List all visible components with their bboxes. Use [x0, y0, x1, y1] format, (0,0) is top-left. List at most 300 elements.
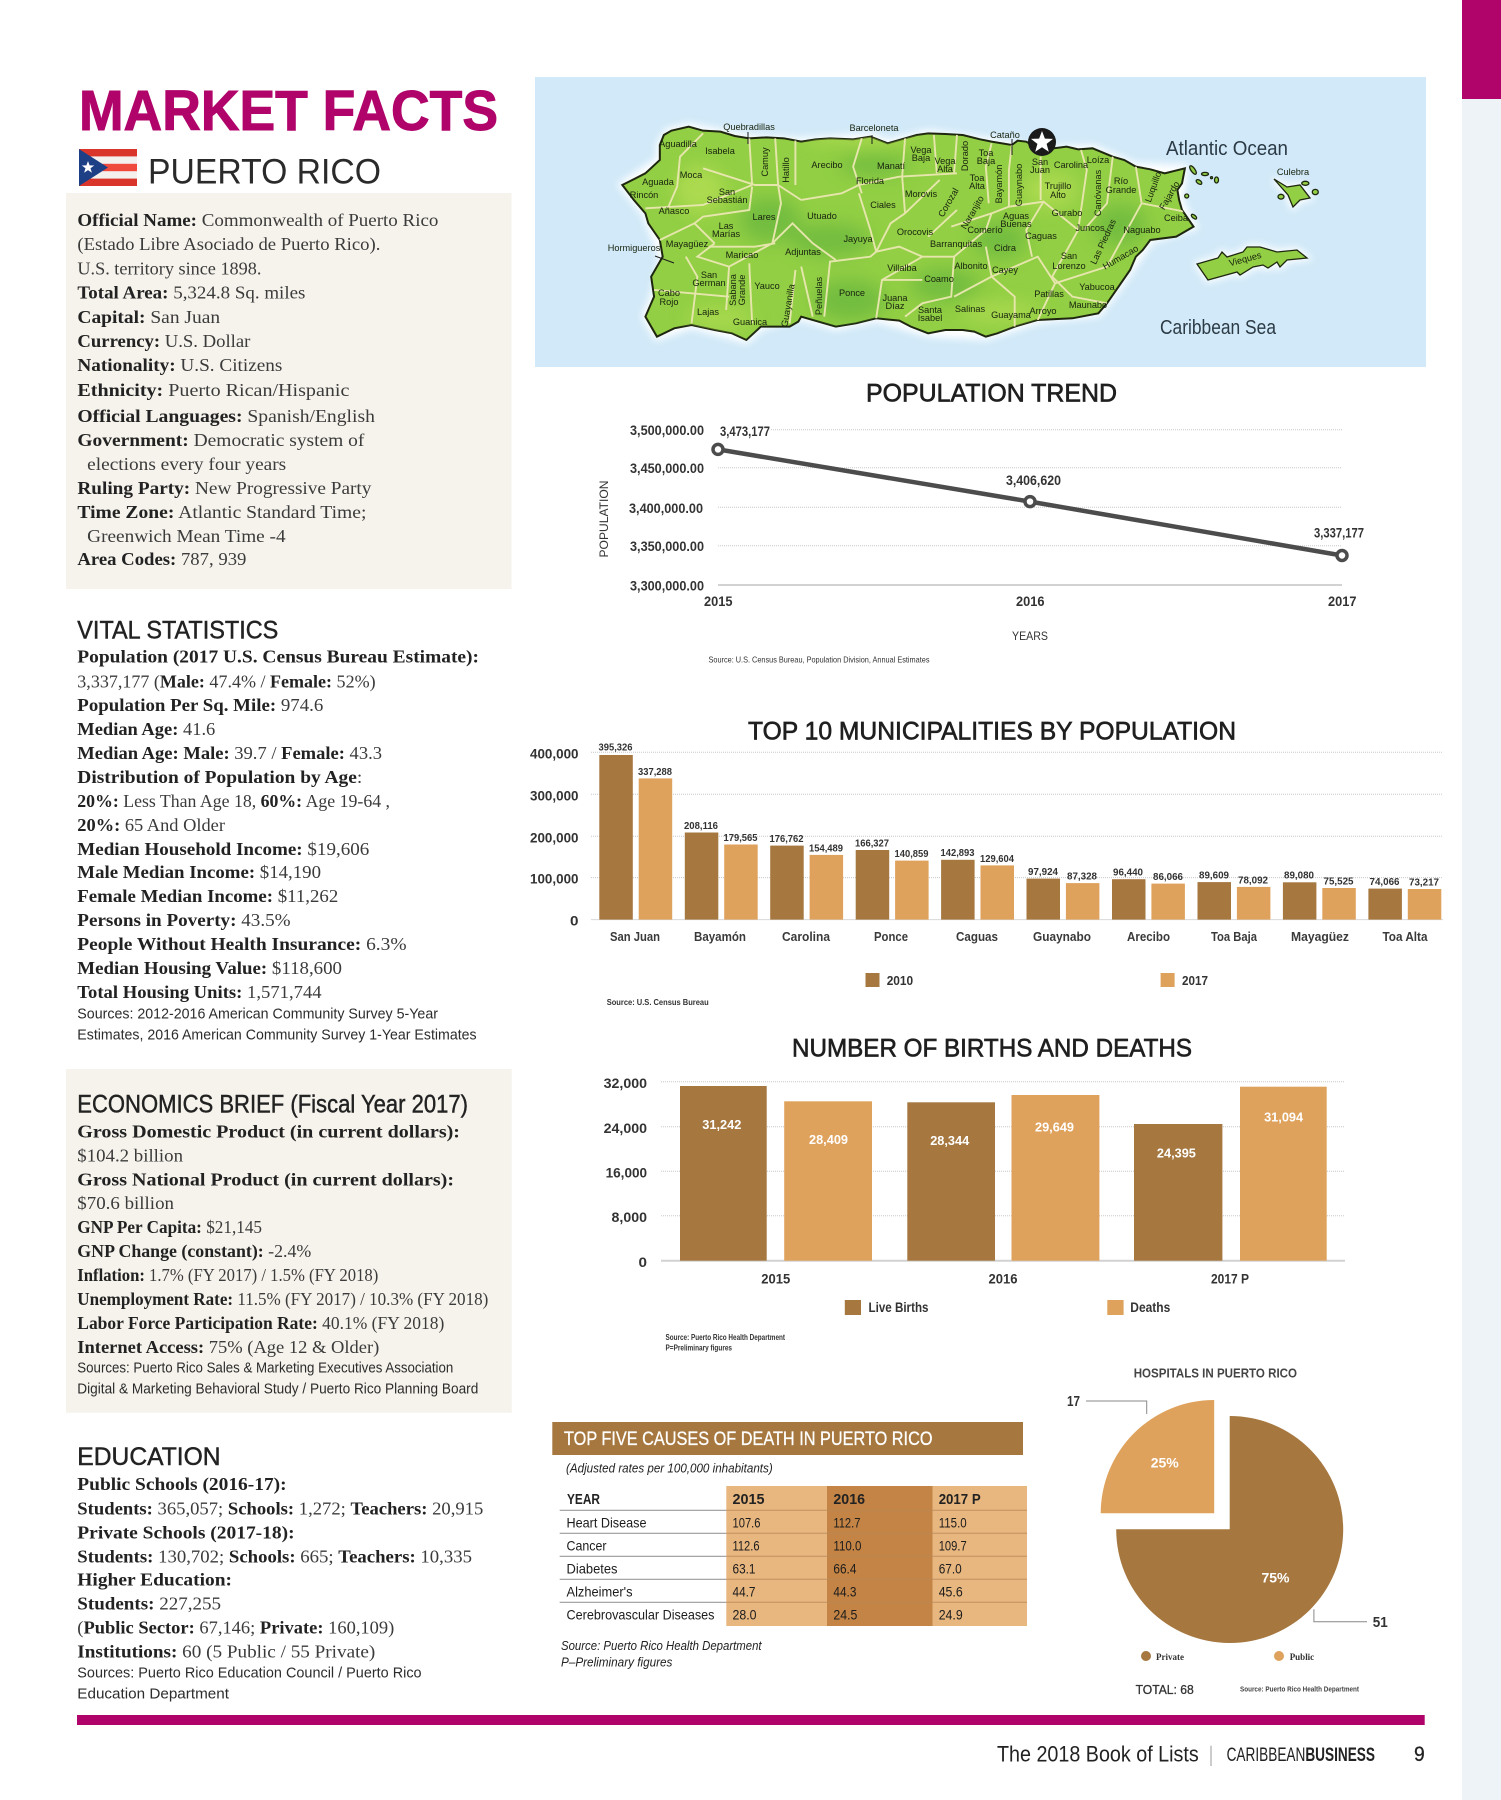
coloured columns [726, 1486, 1027, 1626]
municipality labels: Guanica [733, 317, 768, 327]
row: heart disease: 107.6 [732, 1514, 761, 1530]
row: cancer [566, 1537, 967, 1553]
x axis labels: 2016 [988, 1272, 1018, 1286]
category labels: Mayagüez [1291, 929, 1349, 944]
municipality labels [608, 122, 1310, 328]
municipality labels: Río [1114, 176, 1128, 186]
panel: education: Sources: Puerto Rico Education Council / Puerto Rico [77, 1664, 422, 1682]
value labels: 74,066 [1370, 876, 1400, 888]
category labels: Guaynabo [1033, 929, 1091, 944]
municipality labels: Lorenzo [1052, 261, 1086, 271]
pie chart: hospitals [1067, 1367, 1388, 1697]
panel: vital statistics: Persons in Poverty: 43.5% [77, 910, 291, 930]
x axis title: YEARS [1012, 631, 1048, 643]
magazine name: CARIBBEANBUSINESS [1227, 1745, 1375, 1766]
panel: economics brief: Sources: Puerto Rico Sales & Marketing Executives Association [77, 1360, 453, 1376]
row: alzheimer's: 44.7 [732, 1583, 756, 1599]
title: MARKET FACTS [79, 79, 498, 143]
municipality labels: Hormigueros [608, 243, 661, 253]
municipality labels: Humacao [1101, 243, 1140, 272]
y axis labels: 100,000 [530, 872, 578, 887]
value labels: 208,116 [684, 820, 718, 832]
label: Caribbean Sea: Caribbean Sea [1160, 317, 1277, 339]
municipality labels: Cidra [994, 243, 1017, 253]
municipality labels: Rojo [660, 297, 678, 307]
y axis labels: 300,000 [530, 788, 578, 803]
panel: official facts [66, 193, 512, 589]
panel: economics brief: GNP Change (constant): -2.4% [77, 1241, 311, 1262]
panel: official facts: Capital: San Juan [77, 307, 220, 327]
trend line [718, 449, 1342, 556]
panel: education: (Public Sector: 67,146; Private: 160,109) [77, 1618, 394, 1639]
table: top five causes of death [552, 1422, 1027, 1670]
value labels: 28,344 [930, 1133, 970, 1148]
panel: vital statistics: Population (2017 U.S. Census Bureau Estimate): [77, 647, 479, 668]
panel: education [77, 1443, 483, 1702]
value labels: 140,859 [894, 848, 929, 860]
municipality labels: Comerío [967, 225, 1003, 235]
value labels: 395,326 [598, 742, 633, 754]
slice labels: 25% [1151, 1455, 1179, 1471]
municipality labels: Sebastián [707, 195, 747, 205]
row: diabetes: Diabetes [566, 1560, 618, 1576]
municipality labels: Arecibo [811, 160, 843, 170]
municipality labels: Lares [753, 212, 776, 222]
category labels: Arecibo [1127, 929, 1170, 944]
value labels: 97,924 [1028, 866, 1058, 878]
table subtitle: (Adjusted rates per 100,000 inhabitants) [566, 1461, 773, 1476]
value labels: 176,762 [770, 833, 804, 845]
total: TOTAL: 68 [1136, 1682, 1194, 1697]
bars: live births [680, 1086, 1222, 1261]
panel: vital statistics: Sources: 2012-2016 American Community Survey 5-Year [77, 1006, 438, 1022]
panel: official facts: Time Zone: Atlantic Standard Time; [77, 502, 366, 522]
municipality labels: Ceiba [1164, 213, 1189, 223]
municipality labels: Vega [935, 156, 956, 166]
y axis labels: 3,400,000.00 [629, 501, 703, 516]
header row: 2017 P [939, 1491, 981, 1508]
municipality labels: Gurabo [1052, 208, 1082, 218]
municipality labels: Isabel [918, 313, 942, 323]
panel: education: Institutions: 60 (5 Public / 55 Private) [77, 1642, 375, 1663]
legend: Deaths [1130, 1300, 1170, 1315]
table source: Source: Puerto Rico Health Department [561, 1638, 763, 1653]
panel: vital statistics: 3,337,177 (Male: 47.4% / Female: 52%) [77, 671, 376, 692]
value labels: 129,604 [980, 853, 1014, 865]
municipality labels: Las Piedras [1088, 217, 1118, 266]
panel: vital statistics: Estimates, 2016 American Community Survey 1-Year Estimates [77, 1026, 477, 1044]
municipality labels: Aguada [642, 177, 675, 187]
category labels: Ponce [874, 929, 908, 944]
municipality labels: Naranjito [959, 194, 986, 231]
footer [997, 1742, 1425, 1767]
pie legend [1141, 1651, 1314, 1663]
value labels: 96,440 [1113, 866, 1143, 878]
panel: vital statistics: Median Housing Value: $118,600 [77, 958, 342, 978]
municipality labels: Marías [712, 229, 740, 239]
data points [713, 444, 1347, 560]
panel: education: Higher Education: [77, 1570, 232, 1590]
panel: vital statistics: People Without Health Insurance: 6.3% [77, 934, 407, 954]
municipality labels: Salinas [955, 304, 985, 314]
y axis labels: 32,000 [604, 1076, 647, 1091]
table heading band: TOP FIVE CAUSES OF DEATH IN PUERTO RICO [564, 1429, 932, 1450]
y axis labels: 200,000 [530, 830, 578, 845]
data labels: 3,473,177 [720, 424, 770, 439]
category labels: Toa Baja [1211, 929, 1258, 944]
municipality labels: Juncos [1075, 223, 1105, 233]
row: diabetes: 66.4 [833, 1560, 857, 1576]
municipality labels: Vieques [1228, 250, 1263, 268]
row: alzheimer's: 45.6 [939, 1583, 963, 1599]
source: P=Preliminary figures [666, 1344, 732, 1353]
x axis labels: 2016 [1016, 594, 1045, 609]
municipality labels: Guaynabo [1014, 164, 1024, 206]
municipality labels: Toa [979, 148, 994, 158]
municipality labels: Baja [912, 153, 931, 163]
row: cerebrovascular diseases: Cerebrovascular Diseases [566, 1606, 714, 1622]
municipality labels: Aguas [1003, 211, 1029, 221]
value labels: 75,525 [1324, 876, 1354, 888]
municipality labels: Adjuntas [785, 247, 821, 257]
panel: economics brief: Internet Access: 75% (Age 12 & Older) [77, 1337, 379, 1358]
data labels [720, 424, 1364, 540]
legend [866, 973, 1208, 988]
value labels: 86,066 [1153, 871, 1183, 883]
municipality labels: Alto [1050, 190, 1066, 200]
panel: official facts: Area Codes: 787, 939 [77, 549, 246, 569]
source: Source: Puerto Rico Health Department [666, 1333, 785, 1342]
municipality labels: Aguadilla [659, 139, 698, 149]
main island [622, 127, 1194, 340]
y axis labels: 0 [638, 1255, 647, 1270]
leader ticks [655, 132, 1012, 263]
value labels: 31,094 [1264, 1110, 1304, 1125]
y axis labels: 8,000 [612, 1210, 647, 1225]
panel: vital statistics: Male Median Income: $14,190 [77, 862, 321, 882]
value labels: 89,609 [1199, 870, 1229, 882]
municipality labels: San [1032, 157, 1048, 167]
right page edge stripe [1462, 0, 1501, 1800]
municipality labels: Bayamón [994, 165, 1004, 203]
municipality labels: Juan [1030, 165, 1050, 175]
municipality labels: Isabela [705, 146, 736, 156]
panel: official facts: Total Area: 5,324.8 Sq. miles [77, 283, 305, 303]
category labels: Bayamón [694, 929, 746, 944]
municipality labels: Carolina [1054, 160, 1089, 170]
row lines [560, 1510, 726, 1602]
category labels: San Juan [610, 929, 660, 944]
row: alzheimer's [566, 1583, 963, 1599]
row: cancer: 112.6 [732, 1537, 760, 1553]
y axis labels [530, 746, 578, 929]
panel: education: Students: 227,255 [77, 1594, 221, 1614]
category labels [610, 929, 1428, 944]
municipality labels: Naguabo [1123, 225, 1161, 235]
row: diabetes: 67.0 [939, 1560, 962, 1576]
panel: economics brief: Inflation: 1.7% (FY 2017) / 1.5% (FY 2018) [77, 1265, 378, 1286]
panel: economics brief: Gross National Product (in current dollars): [77, 1169, 454, 1190]
y axis labels: 16,000 [606, 1166, 647, 1181]
data labels: 3,337,177 [1314, 526, 1364, 540]
value labels [702, 1110, 1304, 1160]
panel: vital statistics: Median Age: Male: 39.7 / Female: 43.3 [77, 743, 382, 763]
municipality labels: Lajas [697, 307, 719, 317]
municipality labels: Ciales [870, 200, 896, 210]
category labels: Carolina [782, 929, 831, 944]
panel: economics brief: Labor Force Participation Rate: 40.1% (FY 2018) [77, 1313, 444, 1334]
municipality labels: Moca [680, 170, 703, 180]
source [666, 1333, 785, 1353]
slice labels [1151, 1455, 1290, 1585]
municipality labels: San [719, 187, 735, 197]
y axis labels [604, 1076, 647, 1270]
municipality labels: Jayuya [843, 234, 873, 244]
municipality labels: Coamo [924, 274, 954, 284]
source: Source: U.S. Census Bureau [607, 997, 709, 1007]
municipality labels: Yauco [754, 281, 780, 291]
panel: official facts: Ruling Party: New Progressive Party [77, 478, 371, 498]
municipality labels: Corozal [936, 186, 961, 219]
municipality labels: Maricao [726, 250, 758, 260]
row: alzheimer's: 44.3 [833, 1583, 857, 1599]
value labels: 78,092 [1238, 874, 1268, 886]
panel: official facts: U.S. territory since 1898. [77, 258, 261, 278]
table heading band [552, 1422, 1023, 1455]
municipality labels: Rincón [630, 190, 658, 200]
municipality labels: San [1061, 251, 1077, 261]
label: Atlantic Ocean: Atlantic Ocean [1166, 138, 1288, 160]
municipality labels: Maunabo [1069, 300, 1107, 310]
value labels: 28,409 [809, 1132, 848, 1147]
panel: official facts: elections every four years [87, 454, 286, 474]
pie legend: Private [1156, 1653, 1184, 1663]
panel: education: Education Department [77, 1686, 230, 1702]
row: cerebrovascular diseases [566, 1606, 963, 1622]
municipality labels: German [692, 278, 726, 288]
municipality labels: Grande [737, 275, 747, 305]
panel: education: Students: 130,702; Schools: 665; Teachers: 10,335 [77, 1546, 472, 1566]
table source [561, 1638, 763, 1670]
value labels: 337,288 [638, 766, 672, 778]
chart title: TOP 10 MUNICIPALITIES BY POPULATION [748, 718, 1236, 746]
callout: 51 private hospitals: 51 [1373, 1614, 1388, 1631]
municipality labels: Baja [977, 156, 996, 166]
panel: economics brief: Gross Domestic Product (in current dollars): [77, 1121, 460, 1142]
municipality labels: Juana [882, 293, 908, 303]
row: diabetes [566, 1560, 962, 1576]
municipality labels: Cataño [990, 130, 1020, 140]
municipality labels: Las [719, 221, 734, 231]
header row: 2015 [732, 1491, 764, 1508]
bar chart: births and deaths [604, 1035, 1345, 1353]
panel: economics brief: $104.2 billion [77, 1145, 183, 1165]
panel: official facts: Official Languages: Spanish/English [77, 406, 375, 426]
subtitle: Puerto Rico: PUERTO RICO [148, 152, 381, 192]
municipality labels: Díaz [886, 301, 905, 311]
value labels: 73,217 [1409, 876, 1439, 888]
municipality labels: Villalba [887, 263, 918, 273]
pie legend: Public [1290, 1653, 1314, 1663]
row: cancer: Cancer [566, 1537, 607, 1553]
municipality labels: Barranquitas [930, 239, 982, 249]
category labels: Caguas [956, 929, 998, 944]
panel: education: Students: 365,057; Schools: 1,272; Teachers: 20,915 [77, 1498, 483, 1518]
panel: economics brief: GNP Per Capita: $21,145 [77, 1217, 262, 1237]
panel: economics brief: Unemployment Rate: 11.5% (FY 2017) / 10.3% (FY 2018) [77, 1289, 488, 1310]
value labels: 154,489 [809, 842, 843, 854]
y axis labels: 3,450,000.00 [630, 461, 704, 476]
panel: vital statistics [77, 616, 479, 1044]
panel: economics brief [66, 1069, 512, 1413]
municipality labels: Cabo [658, 288, 680, 298]
legend [845, 1300, 1170, 1315]
panel: vital statistics: Median Age: 41.6 [77, 719, 215, 739]
municipality labels: Utuado [807, 211, 837, 221]
footer title: The 2018 Book of Lists [997, 1742, 1199, 1767]
municipality labels: Barceloneta [849, 123, 899, 133]
municipality labels: San [701, 270, 717, 280]
source: Source: U.S. Census Bureau, Population Division, Annual Estimates [708, 654, 930, 664]
value labels: 31,242 [702, 1117, 741, 1132]
heading: education: EDUCATION [77, 1443, 221, 1471]
value labels [598, 742, 1439, 888]
x axis labels: 2017 P [1211, 1272, 1249, 1286]
row: diabetes: 63.1 [732, 1560, 756, 1576]
row: cerebrovascular diseases: 24.9 [939, 1606, 963, 1622]
icon: Puerto Rico flag [79, 149, 137, 186]
public slice [1101, 1400, 1214, 1513]
header row [567, 1491, 981, 1508]
value labels: 29,649 [1035, 1120, 1074, 1135]
municipality labels: Dorado [960, 141, 970, 171]
y axis labels: 3,500,000.00 [630, 423, 704, 438]
municipality labels: Guayanilla [779, 282, 797, 328]
bar chart: top 10 municipalities [530, 718, 1443, 1007]
y axis labels [629, 423, 704, 594]
municipality labels: Fajardo [1157, 180, 1182, 211]
row: cerebrovascular diseases: 24.5 [833, 1606, 858, 1622]
municipality labels: Caguas [1025, 231, 1057, 241]
data labels: 3,406,620 [1006, 473, 1061, 488]
panel: official facts: Official Name: Commonwealth of Puerto Rico [77, 210, 438, 230]
x axis labels: 2015 [761, 1272, 791, 1286]
source: Source: Puerto Rico Health Department [1240, 1685, 1359, 1694]
panel: education: Private Schools (2017-18): [77, 1522, 295, 1543]
value labels: 87,328 [1067, 870, 1097, 882]
panel: official facts: Ethnicity: Puerto Rican/Hispanic [77, 380, 349, 400]
panel: official facts: Currency: U.S. Dollar [77, 331, 250, 351]
x axis labels: 2017 [1328, 594, 1356, 609]
municipality labels: Alta [969, 181, 986, 191]
municipality labels: Trujillo [1045, 181, 1071, 191]
row: heart disease: 115.0 [939, 1514, 967, 1530]
row: heart disease [566, 1514, 967, 1530]
private slice [1116, 1416, 1343, 1643]
y axis title: POPULATION [597, 480, 611, 558]
municipality labels: Hatillo [781, 157, 791, 183]
row: cancer: 110.0 [833, 1537, 862, 1553]
panel: vital statistics: Total Housing Units: 1,571,744 [77, 982, 322, 1002]
chart title: POPULATION TREND [866, 380, 1117, 408]
row: heart disease: Heart Disease [566, 1514, 647, 1530]
municipality labels: Patillas [1034, 289, 1064, 299]
x axis labels [704, 594, 1356, 609]
panel: official facts: Nationality: U.S. Citizens [77, 355, 282, 375]
municipality labels: Canóvanas [1093, 169, 1103, 216]
municipality labels: Alta [937, 164, 954, 174]
municipality labels: Quebradillas [723, 122, 775, 132]
municipality labels: Buenas [1000, 219, 1032, 229]
panel: vital statistics: Population Per Sq. Mile: 974.6 [77, 695, 323, 715]
y axis labels: 24,000 [604, 1121, 647, 1136]
y axis labels: 3,350,000.00 [630, 539, 704, 554]
municipality labels: Camuy [760, 147, 770, 177]
category labels: Toa Alta [1382, 929, 1428, 944]
legend: 2010 [887, 974, 913, 988]
page number: 9 [1414, 1743, 1425, 1766]
bars: 2017 [639, 778, 1441, 920]
panel: vital statistics: 20%: 65 And Older [77, 815, 225, 835]
municipal borders [645, 133, 1194, 327]
header row: YEAR [567, 1491, 600, 1508]
y axis labels: 0 [570, 914, 578, 929]
municipality labels: Vega [911, 145, 932, 155]
magenta corner tab [1462, 0, 1501, 99]
table source: P–Preliminary figures [561, 1655, 673, 1670]
bars: deaths [784, 1087, 1327, 1261]
y axis labels: 3,300,000.00 [630, 579, 704, 594]
callout: 17 public hospitals [1067, 1393, 1147, 1414]
municipality labels: Grande [1106, 185, 1136, 195]
municipality labels: Sabana [728, 273, 738, 306]
chart title: NUMBER OF BIRTHS AND DEATHS [792, 1035, 1192, 1063]
municipality labels: Guayama [991, 310, 1032, 320]
panel: vital statistics: 20%: Less Than Age 18, 60%: Age 19-64 , [77, 791, 390, 811]
value labels: 24,395 [1157, 1145, 1196, 1160]
heading: vital statistics: VITAL STATISTICS [77, 616, 278, 644]
municipality labels: Yabucoa [1079, 282, 1116, 292]
callout: 51 private hospitals [1314, 1609, 1388, 1631]
row: cerebrovascular diseases: 28.0 [732, 1606, 757, 1622]
value labels: 166,327 [855, 838, 889, 850]
municipality labels: Añasco [659, 206, 689, 216]
municipality labels: Cayey [992, 265, 1018, 275]
panel: vital statistics: Median Household Income: $19,606 [77, 839, 369, 859]
panel: education: Public Schools (2016-17): [77, 1474, 287, 1495]
header row: 2016 [833, 1491, 865, 1508]
panel: vital statistics: Distribution of Population by Age : [77, 767, 362, 787]
municipality labels: Albonito [954, 261, 988, 271]
footer rule [77, 1715, 1425, 1725]
value labels: 142,893 [940, 847, 975, 859]
line chart: population trend [597, 380, 1364, 664]
row: alzheimer's: Alzheimer's [566, 1583, 632, 1599]
municipality labels: Luquillo [1143, 170, 1163, 204]
municipality labels: Morovis [905, 189, 937, 199]
legend: 2017 [1182, 974, 1208, 988]
municipality labels: Santa [918, 305, 943, 315]
island glow [622, 127, 1310, 340]
bars: 2010 [599, 755, 1402, 920]
x axis labels [761, 1272, 1249, 1286]
municipality labels: Manatí [877, 161, 905, 171]
municipality labels: Florida [856, 176, 885, 186]
icon: San Juan capital star [1028, 128, 1056, 156]
panel: official facts: (Estado Libre Asociado de Puerto Rico). [77, 234, 380, 255]
municipality labels: Toa [970, 173, 985, 183]
callout: 17 public hospitals: 17 [1067, 1393, 1080, 1410]
